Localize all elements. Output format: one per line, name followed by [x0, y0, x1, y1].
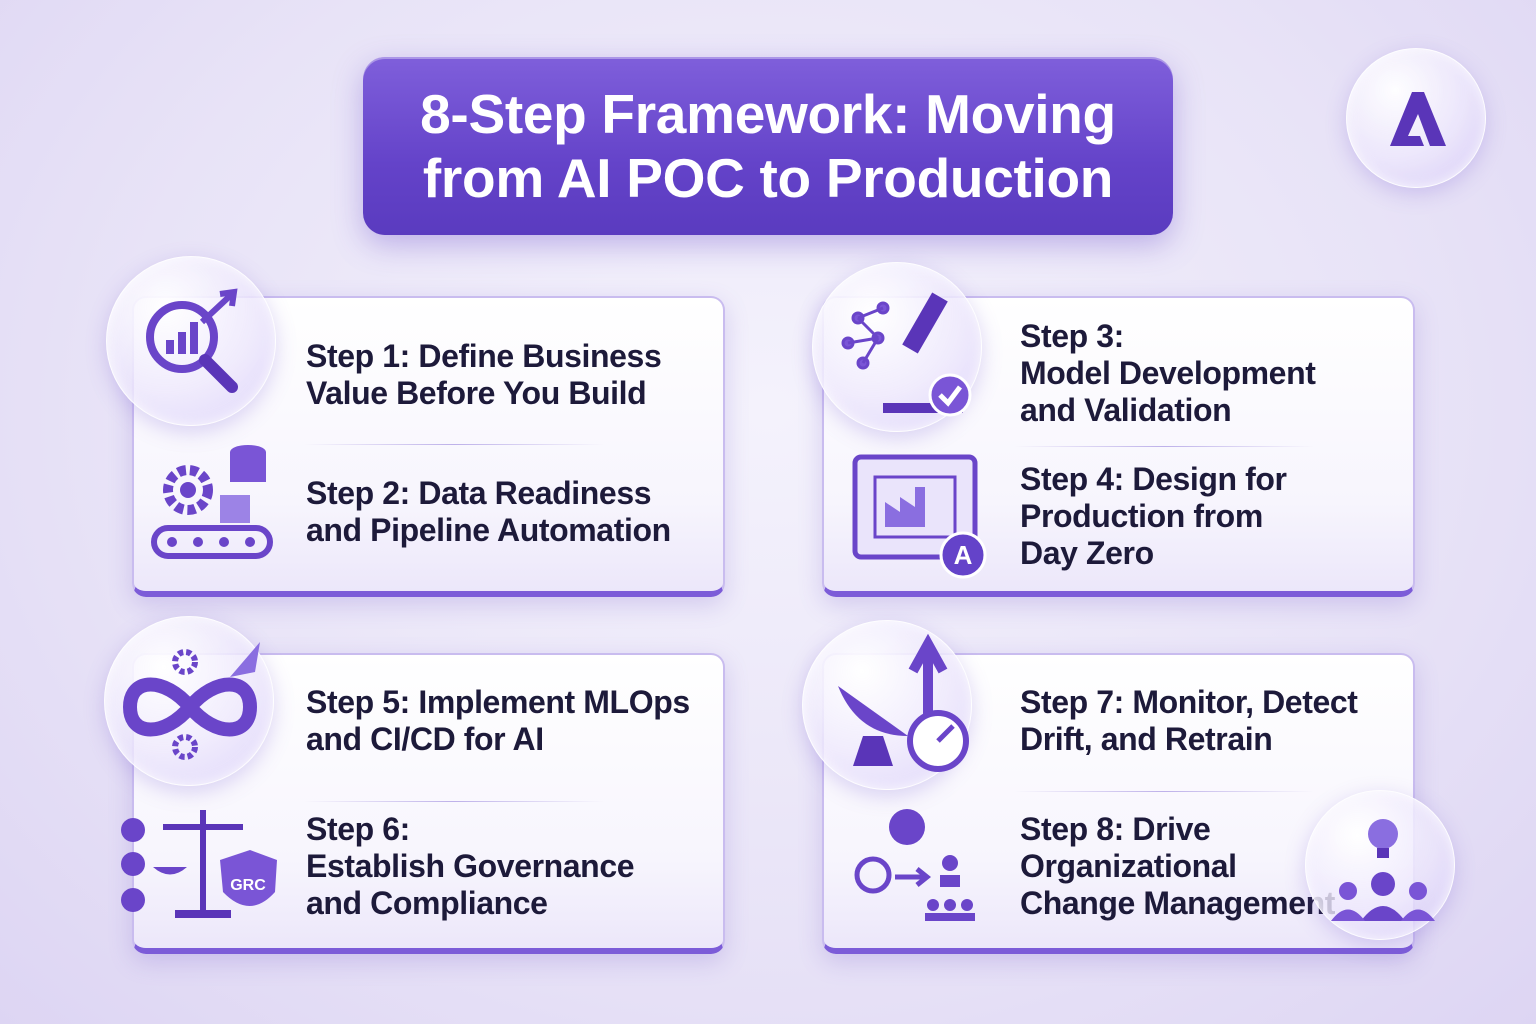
- text: step 2: [306, 475, 671, 548]
- icon: scales GRC: [121, 810, 277, 918]
- icon: gears conveyor: [151, 445, 273, 559]
- icon: satellite gauge: [802, 620, 972, 790]
- text: step 4: Step 4: Design for: [1020, 461, 1287, 497]
- text: step 4: Day Zero: [1020, 535, 1154, 571]
- text: step 8: [1020, 811, 1335, 921]
- text: step 1: Value Before You Build: [306, 375, 646, 411]
- text: step 2: Step 2: Data Readiness: [306, 475, 651, 511]
- title: [363, 57, 1173, 235]
- icon: blueprint: [852, 454, 986, 578]
- text: step 6: Establish Governance: [306, 848, 634, 884]
- icon: scales GRC: GRC: [230, 877, 266, 894]
- text: step 8: Step 8: Drive: [1020, 811, 1210, 847]
- panel: steps 7-8: [822, 653, 1415, 954]
- text: step 5: and CI/CD for AI: [306, 721, 544, 757]
- text: step 7: Step 7: Monitor, Detect: [1020, 684, 1358, 720]
- text: step 6: Step 6:: [306, 811, 410, 847]
- text: step 5: Step 5: Implement MLOps: [306, 684, 690, 720]
- panel: steps 1-2: [132, 296, 725, 597]
- text: step 6: [306, 811, 634, 921]
- text: step 8: Organizational: [1020, 848, 1237, 884]
- icon: blueprint: A: [954, 540, 973, 570]
- text: step 3: [1020, 318, 1316, 428]
- icon: lightbulb team: [1305, 790, 1455, 940]
- text: step 7: Drift, and Retrain: [1020, 721, 1272, 757]
- panel: steps 3-4: [822, 296, 1415, 597]
- text: step 8: Change Management: [1020, 885, 1335, 921]
- text: step 4: [1020, 461, 1287, 571]
- text: step 6: and Compliance: [306, 885, 548, 921]
- text: step 3: Step 3:: [1020, 318, 1124, 354]
- text: step 5: [306, 684, 690, 757]
- text: step 3: and Validation: [1020, 392, 1231, 428]
- text: step 4: Production from: [1020, 498, 1263, 534]
- icon: logo bubble: [1346, 48, 1486, 188]
- icon: microscope network: [812, 262, 982, 432]
- text: step 1: Step 1: Define Business: [306, 338, 661, 374]
- text: step 3: Model Development: [1020, 355, 1315, 391]
- text: step 2: and Pipeline Automation: [306, 512, 671, 548]
- icon: org chart: [854, 809, 975, 921]
- title: from AI POC to Production: [423, 147, 1113, 209]
- text: step 1: [306, 338, 661, 411]
- icon: infinity rocket: [104, 616, 274, 786]
- panel: steps 5-6: [132, 653, 725, 954]
- title: 8-Step Framework: Moving: [420, 83, 1116, 145]
- text: step 7: [1020, 684, 1358, 757]
- icon: magnifier chart: [106, 256, 276, 426]
